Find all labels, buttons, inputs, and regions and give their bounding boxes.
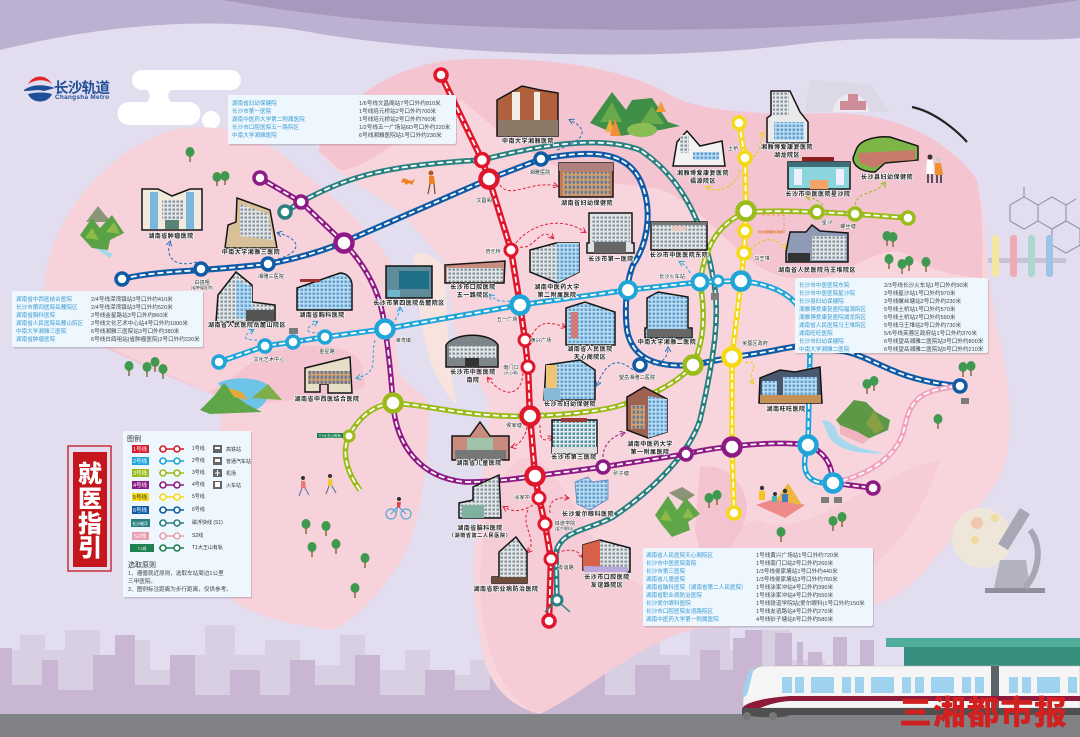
land: central bank bbox=[318, 59, 1010, 714]
small station icons bbox=[289, 293, 969, 503]
station names: 文化艺术中心 bbox=[253, 355, 285, 363]
metro line maglev bbox=[285, 143, 716, 600]
station names: 砂子塘 bbox=[613, 469, 629, 477]
legend line names: T1大王山有轨 bbox=[192, 544, 223, 551]
hospital: 中南大学湘雅二医院 bbox=[638, 292, 696, 346]
station names: 螺丝塘 bbox=[840, 222, 856, 230]
banner: 就医指引: 就 bbox=[78, 454, 102, 489]
panel: southern hospitals: 1号线铁道学院站(爱尔眼科)1号口外约150米 bbox=[756, 599, 865, 607]
hospital: 湘雅博爱康复医院湖龙院区: 湖龙院区 bbox=[774, 151, 800, 159]
station names: 友谊路 bbox=[558, 563, 575, 571]
hospital: 长沙爱尔眼科医院 bbox=[562, 477, 614, 518]
panel: southern hospitals: 4号线砂子塘站6号口外约580米 bbox=[756, 615, 833, 623]
panel: western hospitals: 6号线白鸽咀站(省肿瘤医院)2号口外约220米 bbox=[91, 335, 200, 343]
station names: 星沙 bbox=[822, 219, 832, 226]
panel: legend bbox=[123, 431, 252, 598]
metro line 4 bbox=[260, 178, 873, 488]
panel: western hospitals: 湖南省中西医结合医院 bbox=[16, 295, 72, 303]
station names: 长沙火车站 bbox=[659, 272, 685, 280]
picnic scene bbox=[756, 483, 805, 518]
legend line names: 6号线 bbox=[192, 506, 205, 513]
station names: (爱尔眼科) bbox=[555, 525, 574, 531]
hospital: 长沙市口腔医院五一路院区 bbox=[445, 261, 505, 299]
mountains bbox=[80, 92, 890, 537]
panel: eastern hospitals: 湖南省人民医院马王堆院区 bbox=[799, 321, 867, 329]
platform canopy bbox=[886, 638, 1080, 666]
hospital: 长沙市中医医院南院: 南院 bbox=[466, 376, 480, 384]
hospital: 湖南中医药大学第二附属医院 bbox=[530, 243, 580, 299]
panel: northern hospitals: 1号线培元桥站2号口外约760米 bbox=[359, 115, 436, 123]
legend swatches: 6号线 bbox=[133, 506, 148, 514]
stations bbox=[116, 69, 966, 627]
hospital: 湖南旺旺医院: 湖南旺旺医院 bbox=[766, 405, 806, 413]
hospital: 中南大学湘雅医院 bbox=[497, 86, 558, 145]
hospital: 湖南省职业病防治医院: 湖南省职业病防治医院 bbox=[473, 585, 539, 593]
hospital: 湖南省儿童医院: 湖南省儿童医院 bbox=[456, 459, 502, 467]
station names: (天心阁) bbox=[504, 369, 519, 375]
legend swatches: 4号线 bbox=[133, 481, 148, 489]
panel: southern hospitals: 长沙市第三医院 bbox=[646, 567, 686, 575]
hospital: 长沙市妇幼保健院: 长沙市妇幼保健院 bbox=[544, 400, 596, 408]
hospital: 湖南省妇幼保健院 bbox=[559, 163, 613, 207]
hospital: 长沙市第三医院: 长沙市第三医院 bbox=[551, 453, 597, 461]
station names: 湘雅医院 bbox=[530, 168, 551, 176]
panel: southern hospitals: 长沙爱尔眼科医院 bbox=[646, 599, 691, 607]
hospital: 中南大学湘雅医院: 中南大学湘雅医院 bbox=[502, 137, 554, 145]
hospital: 湘雅博爱康复医院湖龙院区: 湘雅博爱康复医院 bbox=[761, 143, 813, 151]
legend swatches: 5号线 bbox=[133, 493, 148, 501]
hospital: 湖南省人民医院马王堆院区: 湖南省人民医院马王堆院区 bbox=[778, 266, 856, 274]
station names: 望岳湘雅二医院 bbox=[619, 373, 656, 381]
T1 line label bbox=[317, 433, 343, 438]
panel: eastern hospitals: 湘雅博爱康复医院湖龙院区 bbox=[799, 313, 867, 321]
panel: northern hospitals: 1/6号线文昌阁站7号口外约810米 bbox=[359, 99, 441, 107]
legend line names: 4号线 bbox=[192, 481, 205, 488]
station names: 五一广场 bbox=[497, 315, 517, 323]
legend swatches: T1线 bbox=[138, 545, 146, 551]
panel: southern hospitals: 1/3号线侯家塘站1号口外约440米 bbox=[756, 567, 838, 575]
hospital: 湖南省职业病防治医院 bbox=[473, 537, 539, 593]
legend line names: 1号线 bbox=[192, 445, 205, 452]
hospital: 长沙市口腔医院友谊路院区: 长沙市口腔医院 bbox=[584, 573, 630, 581]
panel: western hospitals: 2/4号线溁湾镇站3号口外约410米 bbox=[91, 295, 173, 303]
legend swatches: 1号线 bbox=[133, 445, 148, 453]
skyline bbox=[0, 610, 874, 716]
logo: Changsha Metro bbox=[24, 76, 110, 102]
metro line 6 bbox=[122, 154, 960, 386]
banner: 就医指引 bbox=[68, 446, 111, 571]
hospital: 湘雅博爱康复医院福源院区: 福源院区 bbox=[690, 177, 716, 185]
station names: 培元桥 bbox=[485, 247, 502, 255]
hospital: 湖南省人民医院天心阁院区: 天心阁院区 bbox=[574, 353, 606, 361]
panel: southern hospitals: 长沙市中医医院南院 bbox=[646, 559, 697, 567]
panel: eastern hospitals: 3号线星沙站1号口外约970米 bbox=[884, 289, 956, 297]
panel: southern hospitals: 1号线黄兴广场站1号口外约720米 bbox=[756, 551, 839, 559]
legend facility icons: 机场 bbox=[226, 470, 236, 477]
station names: 铁道学院 bbox=[555, 519, 576, 527]
logo: Changsha Metro: Changsha Metro bbox=[55, 94, 109, 101]
metro line 5 bbox=[732, 123, 746, 513]
panel: northern hospitals: 中南大学湘雅医院 bbox=[232, 131, 277, 139]
panel: eastern hospitals: 长沙县妇幼保健院 bbox=[799, 297, 844, 305]
T1 line label: T1大王山有轨 bbox=[319, 433, 341, 438]
hospital: 长沙市口腔医院五一路院区: 五一路院区 bbox=[457, 291, 489, 299]
station names: 溁湾镇 bbox=[395, 336, 411, 344]
selection principles: 选取原则 bbox=[128, 560, 156, 569]
hospital: 湖南中医药大学第一附属医院 bbox=[627, 387, 673, 456]
legend swatches: 长沙磁浮 bbox=[132, 520, 148, 526]
hospital: 长沙市中医医院星沙院 bbox=[785, 157, 851, 198]
panel: western hospitals: 湖南省肿瘤医院 bbox=[16, 335, 56, 343]
hospital: 长沙市中医医院南院 bbox=[446, 335, 498, 384]
station names: 白鸽咀 bbox=[194, 278, 210, 286]
hospital: 湖南省中西医结合医院: 湖南省中西医结合医院 bbox=[294, 395, 360, 403]
legend facility icons: 普通汽车站 bbox=[226, 458, 251, 465]
selection principles bbox=[128, 560, 232, 593]
trees bbox=[124, 147, 976, 598]
selection principles: 2、图例标注距离为步行距离，仅供参考。 bbox=[128, 585, 232, 593]
hospital: 湖南省肿瘤医院: 湖南省肿瘤医院 bbox=[148, 232, 194, 240]
panel: southern hospitals: 湖南省职业病防治医院 bbox=[646, 591, 702, 599]
legend line names: 磁浮快线 (S1) bbox=[192, 519, 223, 526]
hospital: 长沙市口腔医院五一路院区: 长沙市口腔医院 bbox=[450, 283, 496, 291]
panel: western hospitals: 长沙市第四医院岳麓院区 bbox=[16, 303, 78, 311]
panel: northern hospitals: 湖南省妇幼保健院 bbox=[232, 99, 277, 107]
panel: northern hospitals: 长沙市第一医院 bbox=[232, 107, 272, 115]
decoration: medical sign bbox=[805, 80, 890, 112]
panel: western hospitals: 2号线文化艺术中心站4号口外约1000米 bbox=[91, 319, 188, 327]
hospital: 中南大学湘雅二医院: 中南大学湘雅二医院 bbox=[638, 338, 696, 346]
logo: Changsha Metro: 长沙轨道 bbox=[54, 79, 110, 97]
hospital: 长沙市口腔医院友谊路院区: 友谊路院区 bbox=[591, 581, 623, 589]
panel: southern hospitals: 1号线南门口站2号口外约260米 bbox=[756, 559, 833, 567]
station names: 涂家冲 bbox=[514, 493, 530, 501]
hospital: 湖南中医药大学第二附属医院: 湖南中医药大学 bbox=[534, 283, 580, 291]
road bbox=[0, 714, 1080, 737]
hospital: 湖南旺旺医院 bbox=[759, 367, 822, 413]
hospital: 湘雅博爱康复医院福源院区: 湘雅博爱康复医院 bbox=[677, 169, 729, 177]
panel: western hospitals: 湖南省胸科医院 bbox=[16, 311, 56, 319]
panel: eastern hospitals: 长沙市妇幼保健院 bbox=[799, 337, 844, 345]
hospital: 湖南省胸科医院 bbox=[297, 273, 352, 319]
metro line 3 bbox=[345, 211, 908, 490]
panel: southern hospitals: 1号线涂家冲站4号口外约550米 bbox=[756, 591, 833, 599]
legend line samples bbox=[159, 446, 184, 551]
selection principles: 三甲医院。 bbox=[128, 577, 156, 585]
panel: southern hospitals bbox=[643, 548, 874, 628]
station names bbox=[191, 144, 856, 571]
panel: eastern hospitals: 3号线螺丝塘站2号口外约230米 bbox=[884, 297, 961, 305]
hospital: 湖南省胸科医院: 湖南省胸科医院 bbox=[299, 311, 345, 319]
panel: southern hospitals: 湖南省儿童医院 bbox=[646, 575, 686, 583]
land: lower left bank bbox=[219, 375, 430, 630]
panel: western hospitals bbox=[12, 291, 204, 348]
station names: 黄兴广场 bbox=[531, 336, 551, 344]
hospital: 长沙市中医医院星沙院: 长沙市中医医院星沙院 bbox=[785, 190, 851, 198]
train bbox=[742, 666, 1080, 720]
hospital: 长沙市第一医院: 长沙市第一医院 bbox=[588, 255, 634, 263]
legend swatches: S2线 bbox=[134, 532, 147, 540]
hospital: 湖南省脑科医院: 湖南省脑科医院 bbox=[457, 524, 503, 532]
panel: eastern hospitals: 6号线望岳湘雅二医院站5号口外约210米 bbox=[884, 345, 984, 353]
panel: northern hospitals bbox=[228, 95, 457, 146]
station names: 湘雅三医院 bbox=[258, 272, 285, 280]
hospital: 长沙市口腔医院友谊路院区 bbox=[583, 540, 630, 589]
hospital: 长沙市妇幼保健院 bbox=[544, 360, 596, 408]
panel: eastern hospitals: 5号线马王堆站2号口外约730米 bbox=[884, 321, 961, 329]
panel: northern hospitals: 1/2号线五一广场站6D号口外约220米 bbox=[359, 123, 451, 131]
legend facility icons: 火车站 bbox=[226, 482, 241, 489]
legend swatches: 2号线 bbox=[133, 457, 148, 465]
panel: eastern hospitals: 6号线望岳湘雅二医院站3号口外约800米 bbox=[884, 337, 984, 345]
metro line 1 bbox=[441, 75, 551, 621]
hospital: 湖南省人民医院马王堆院区 bbox=[778, 225, 856, 274]
masthead: 三湘都市报: 三湘都市报 bbox=[899, 686, 1067, 734]
hospital: 湖南省儿童医院 bbox=[452, 422, 509, 467]
hospital: 湖南省人民医院天心阁院区 bbox=[566, 302, 615, 361]
panel: eastern hospitals: 长沙市中医医院星沙院 bbox=[799, 289, 855, 297]
panel: southern hospitals: 1号线涂家冲站4号口外约390米 bbox=[756, 583, 833, 591]
hospital: 长沙市第一医院 bbox=[587, 213, 634, 263]
hospital: 湖南省脑科医院: （湖南省第二人民医院） bbox=[449, 531, 511, 539]
dashed guide arrows bbox=[169, 120, 885, 557]
panel: northern hospitals: 6号线湘雅医院站1号口外约230米 bbox=[359, 131, 442, 139]
panel: northern hospitals: 1号线培元桥站2号口外约700米 bbox=[359, 107, 436, 115]
station names: 芙蓉区政府 bbox=[742, 339, 768, 347]
banner: 就医指引: 指 bbox=[78, 504, 102, 539]
metro line 2 bbox=[219, 281, 833, 483]
panel: northern hospitals: 长沙市口腔医院五一路院区 bbox=[232, 123, 300, 131]
panel: eastern hospitals: 湘雅博爱康复医院福源院区 bbox=[799, 305, 867, 313]
hospital: 湖南省中西医结合医院 bbox=[294, 357, 360, 403]
panel: western hospitals: 2号线金星路站3号口外约860米 bbox=[91, 311, 168, 319]
hospital: 湘雅博爱康复医院福源院区 bbox=[673, 131, 729, 185]
hospital: 湖南省肿瘤医院 bbox=[142, 189, 202, 240]
station names: 金星路 bbox=[319, 347, 336, 355]
station names: 土桥 bbox=[728, 144, 739, 152]
decoration: hexagon molecule bbox=[1010, 187, 1080, 253]
hospital: 长沙市第四医院岳麓院区: 长沙市第四医院岳麓院区 bbox=[373, 299, 445, 307]
station names: 文昌阁 bbox=[476, 196, 492, 204]
panel: eastern hospitals: 2/3号线长沙火车站1号口外约90米 bbox=[884, 281, 969, 289]
station names: 南门口 bbox=[503, 363, 519, 371]
hospital: 湖南省脑科医院 bbox=[449, 475, 511, 539]
legend swatches bbox=[130, 445, 154, 552]
hospital: 长沙市第三医院 bbox=[551, 418, 597, 461]
legend line names bbox=[192, 445, 223, 551]
station names: (省肿瘤医院) bbox=[191, 284, 214, 290]
panel: eastern hospitals bbox=[795, 278, 989, 354]
panel: southern hospitals: 湖南中医药大学第一附属医院 bbox=[646, 615, 719, 623]
hospital: 长沙市中医医院东院 bbox=[650, 222, 708, 259]
hospital: 湖南省人民医院岳麓山院区 bbox=[208, 272, 286, 329]
hospital: 长沙县妇幼保健院: 长沙县妇幼保健院 bbox=[861, 173, 913, 181]
decoration: palette and microscope bbox=[952, 508, 1045, 593]
hospital: 长沙市中医医院东院: 长沙市中医医院东院 bbox=[650, 251, 708, 259]
hospital: 湖南中医药大学第二附属医院: 第二附属医院 bbox=[537, 291, 577, 299]
banner: 就医指引: 医 bbox=[78, 479, 102, 514]
legend line names: 3号线 bbox=[192, 469, 205, 476]
hospital: 湘雅博爱康复医院湖龙院区 bbox=[761, 91, 813, 159]
panel: legend: 图例 bbox=[127, 434, 141, 443]
panel: eastern hospitals: 5/6号线芙蓉区政府站1号口外约370米 bbox=[884, 329, 977, 337]
decoration: test tubes bbox=[988, 235, 1066, 277]
panel: eastern hospitals: 中南大学湘雅二医院 bbox=[799, 345, 850, 353]
panel: eastern hospitals: 5号线土桥站2号口外约590米 bbox=[884, 313, 956, 321]
legend facility icons bbox=[213, 445, 251, 489]
panel: southern hospitals: 1/3号线侯家塘站3号口外约760米 bbox=[756, 575, 838, 583]
panel: southern hospitals: 1号线友谊路站4号口外约270米 bbox=[756, 607, 833, 615]
panel: southern hospitals: 湖南省脑科医院（湖南省第二人民医院） bbox=[646, 583, 747, 591]
legend facility icons: 高铁站 bbox=[226, 446, 241, 453]
panel: northern hospitals: 湖南中医药大学第二附属医院 bbox=[232, 115, 305, 123]
station names: 侯家塘 bbox=[506, 421, 522, 429]
panel: western hospitals: 中南大学湘雅三医院 bbox=[16, 327, 67, 335]
panel: eastern hospitals: 5号线土桥站1号口外约570米 bbox=[884, 305, 956, 313]
hospital: 湖南省妇幼保健院: 湖南省妇幼保健院 bbox=[561, 199, 613, 207]
panel: western hospitals: 湖南省人民医院岳麓山院区 bbox=[16, 319, 84, 327]
decoration: arc line bbox=[912, 107, 967, 142]
land: left bank bbox=[30, 127, 430, 470]
hospital: 湖南中医药大学第一附属医院: 第一附属医院 bbox=[630, 448, 670, 456]
hospital: 湖南省人民医院天心阁院区: 湖南省人民医院 bbox=[567, 345, 613, 353]
hospital: 中南大学湘雅三医院 bbox=[222, 198, 280, 256]
panel: eastern hospitals: 湖南旺旺医院 bbox=[799, 329, 833, 337]
people and pets bbox=[299, 154, 943, 519]
hospital: 湖南省人民医院岳麓山院区: 湖南省人民医院岳麓山院区 bbox=[208, 321, 286, 329]
metro line S2 bbox=[833, 386, 960, 483]
panel: southern hospitals: 湖南省人民医院天心阁院区 bbox=[646, 551, 714, 559]
hospital: 长沙市第四医院岳麓院区 bbox=[373, 266, 445, 307]
hospital: 长沙市中医医院南院: 长沙市中医医院 bbox=[450, 368, 496, 376]
legend swatches: 3号线 bbox=[133, 469, 148, 477]
panel: southern hospitals: 长沙市口腔医院友谊路院区 bbox=[646, 607, 714, 615]
legend line names: S2线 bbox=[192, 532, 203, 539]
panel: western hospitals: 6号线湘雅三医院站3号口外约380米 bbox=[91, 327, 180, 335]
legend line names: 2号线 bbox=[192, 457, 205, 464]
panel: eastern hospitals: 长沙市中医医院东院 bbox=[799, 281, 850, 289]
station names: 马王堆 bbox=[754, 254, 770, 262]
hospital: 长沙爱尔眼科医院: 长沙爱尔眼科医院 bbox=[562, 510, 614, 518]
selection principles: 1、遵循就近原则，选取车站周边1公里 bbox=[128, 569, 224, 577]
hospital: 湖南中医药大学第一附属医院: 湖南中医药大学 bbox=[627, 440, 673, 448]
panel: western hospitals: 2/4号线溁湾镇站3号口外约520米 bbox=[91, 303, 173, 311]
banner: 就医指引: 引 bbox=[78, 528, 102, 563]
legend line names: 5号线 bbox=[192, 493, 205, 500]
hospital: 长沙县妇幼保健院 bbox=[853, 137, 918, 181]
dashed guide arrows: 长沙县星沙文化 bbox=[759, 229, 784, 234]
hospital: 中南大学湘雅三医院: 中南大学湘雅三医院 bbox=[222, 248, 280, 256]
